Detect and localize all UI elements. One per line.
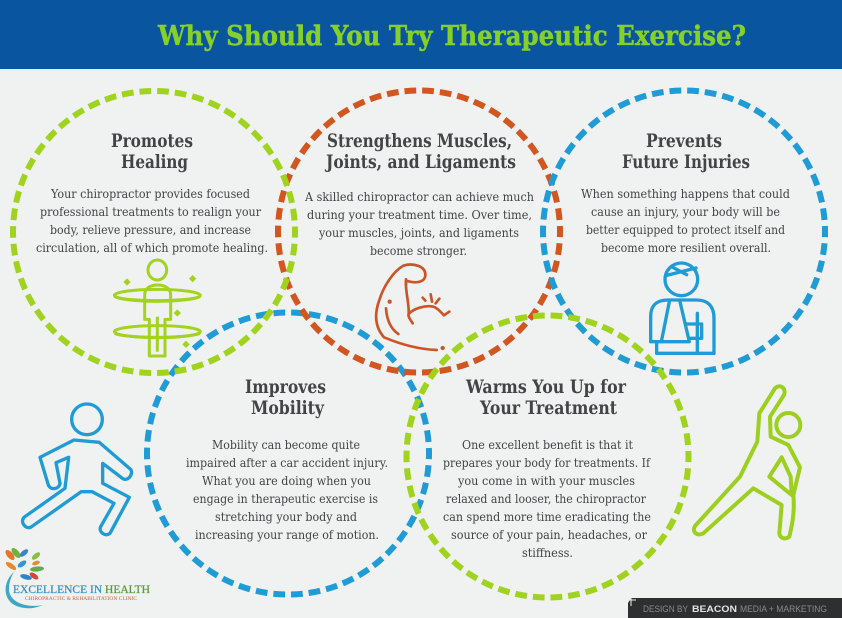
- panel text: improves mobility: Mobility can become quite: [212, 438, 360, 452]
- logo swoosh: [6, 572, 43, 608]
- icon: lunging figure: [23, 404, 132, 535]
- panel text: warms you up: can spend more time eradicating the: [443, 510, 651, 524]
- panel text: warms you up: One excellent benefit is that it: [462, 438, 633, 452]
- circle: promotes healing: [13, 91, 295, 373]
- panel text: prevents future injuries: When something happens that could: [581, 187, 790, 201]
- panel text: improves mobility: Mobility: [251, 398, 325, 419]
- panel text: strengthens muscles: become stronger.: [370, 244, 467, 258]
- panel text: strengthens muscles: Joints, and Ligaments: [324, 152, 516, 173]
- icon: side stretch figure: [694, 386, 800, 538]
- icon: injured person with sling: [651, 263, 714, 353]
- panel text: strengthens muscles: Strengthens Muscles,: [327, 131, 512, 152]
- panel text: prevents future injuries: Prevents: [646, 131, 722, 152]
- panel text: strengthens muscles: during your treatment time. Over time,: [307, 208, 532, 222]
- icon: flexed arm: [376, 265, 449, 350]
- panel text: improves mobility: impaired after a car accident injury.: [186, 456, 388, 470]
- circle: warms you up: [406, 316, 688, 598]
- panel text: warms you up: stiffness.: [522, 546, 573, 560]
- panel text: warms you up: Warms You Up for: [465, 377, 626, 398]
- panel text: warms you up: source of your pain, headaches, or: [451, 528, 647, 542]
- panel text: improves mobility: Improves: [245, 377, 326, 398]
- circle: strengthens muscles: [278, 90, 560, 372]
- footer credit bar: BEACON: [692, 604, 737, 614]
- logo wordmark: EXCELLENCE IN HEALTH: [13, 582, 150, 596]
- panel text: prevents future injuries: Future Injuries: [622, 152, 750, 173]
- panel text: promotes healing: Your chiropractor provides focused: [50, 187, 250, 201]
- footer credit bar: [627, 596, 842, 618]
- panel text: strengthens muscles: your muscles, joints, and ligaments: [318, 226, 519, 240]
- panel text: prevents future injuries: become more resilient overall.: [601, 241, 771, 255]
- panel text: improves mobility: stretching your body and: [215, 510, 357, 524]
- panel text: warms you up: relaxed and looser, the chiropractor: [446, 492, 646, 506]
- panel text: prevents future injuries: cause an injury, your body will be: [591, 205, 780, 219]
- panel text: promotes healing: Healing: [121, 152, 188, 173]
- circle: improves mobility: [147, 312, 429, 594]
- panel text: promotes healing: body, relieve pressure, and increase: [50, 223, 251, 237]
- panel text: promotes healing: circulation, all of which promote healing.: [36, 241, 268, 255]
- logo: excellence in health: [4, 546, 150, 608]
- panel text: prevents future injuries: [581, 131, 790, 255]
- panel text: improves mobility: [186, 377, 388, 542]
- circle: prevents future injuries: [543, 90, 825, 372]
- footer credit bar: DESIGN BY: [643, 604, 688, 614]
- panel text: strengthens muscles: [304, 131, 534, 258]
- panel text: warms you up: [443, 377, 651, 560]
- logo leaves: [4, 546, 44, 581]
- panel text: warms you up: you come in with your muscles: [457, 474, 635, 488]
- panel text: warms you up: Your Treatment: [479, 398, 617, 419]
- panel text: strengthens muscles: A skilled chiropractor can achieve much: [304, 190, 534, 204]
- logo tagline: CHIROPRACTIC & REHABILITATION CLINIC: [25, 597, 138, 602]
- panel text: improves mobility: What you are doing when you: [202, 474, 371, 488]
- panel text: promotes healing: Promotes: [111, 131, 193, 152]
- panel text: improves mobility: engage in therapeutic exercise is: [193, 492, 378, 506]
- header band: [0, 0, 842, 71]
- icon: body with healing rings: [114, 260, 200, 356]
- panel text: warms you up: prepares your body for treatments. If: [443, 456, 651, 470]
- title: Why Should You Try Therapeutic Exercise?: [157, 20, 746, 52]
- panel text: improves mobility: increasing your range of motion.: [195, 528, 379, 542]
- panel text: promotes healing: [36, 131, 268, 255]
- panel text: promotes healing: professional treatments to realign your: [40, 205, 261, 219]
- panel text: prevents future injuries: better equipped to protect itself and: [586, 223, 785, 237]
- footer credit bar: MEDIA + MARKETING: [740, 604, 827, 614]
